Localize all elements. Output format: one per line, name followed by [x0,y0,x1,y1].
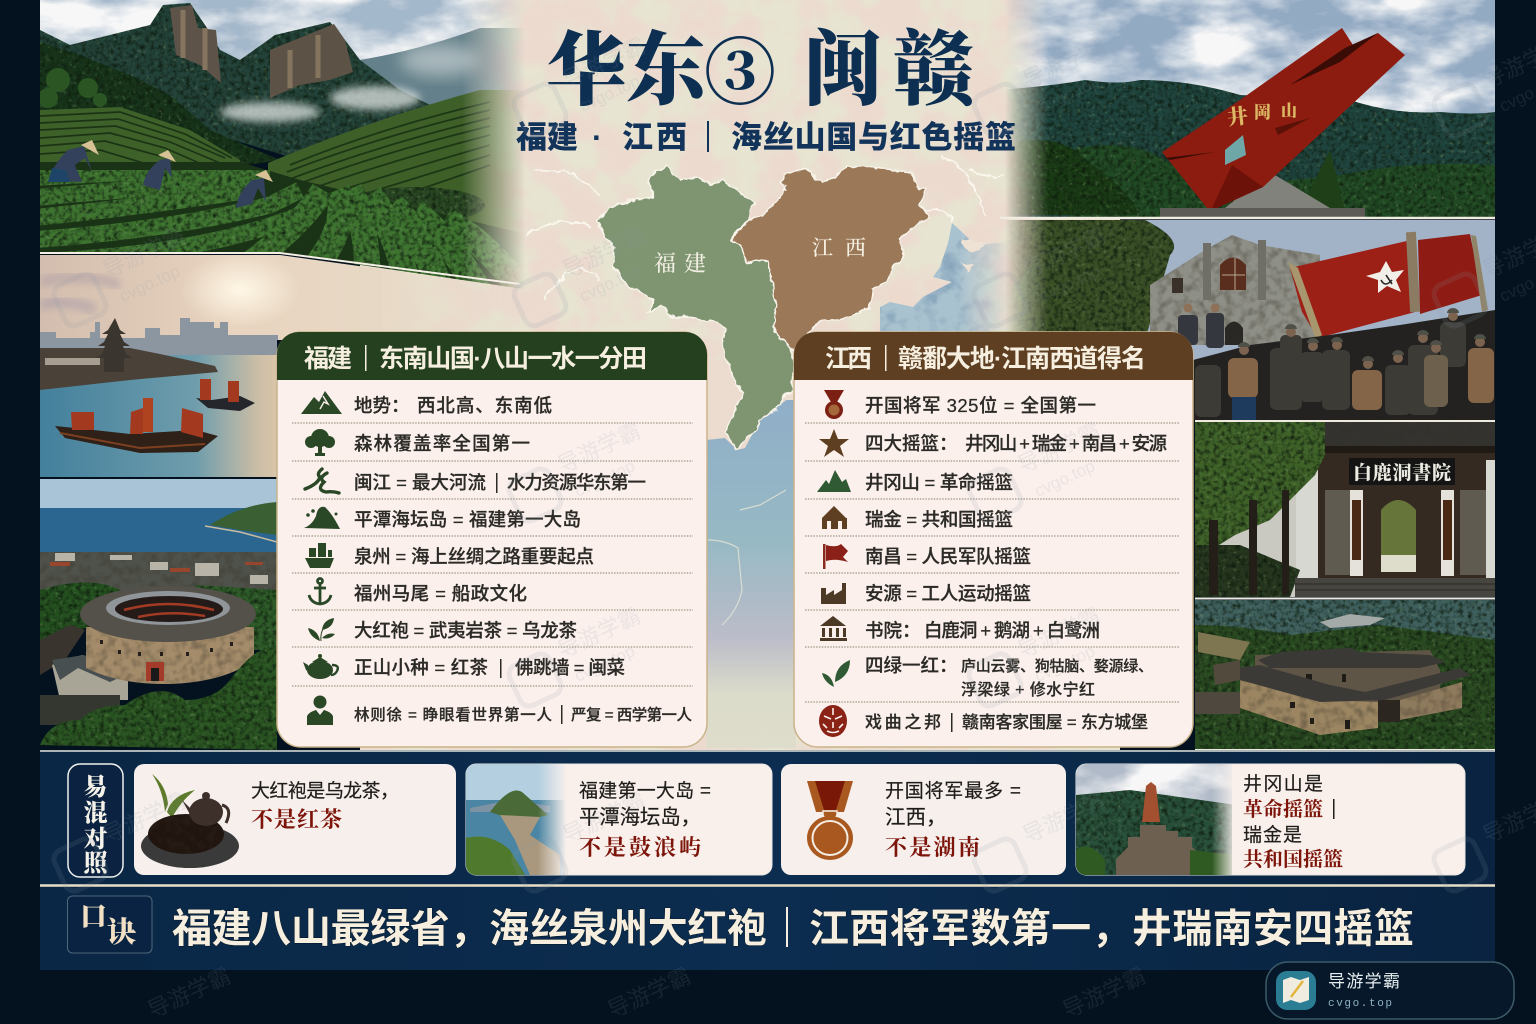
row: Quanzhou: 泉州 = 海上丝绸之路重要起点 [354,546,594,567]
card: cradles: 革命摇篮 [1243,798,1323,821]
photo: Gannan Hakka walled house [1195,600,1495,750]
courtyard walls [1255,650,1440,710]
row: Lin Zexu and Yan Fu: 严复 = 西学第一人 [571,705,692,724]
icon: hall [822,506,847,529]
red monument: 岡 [1254,103,1271,122]
Jiangxi panel header [794,332,1193,380]
photo: Hakka tulou by the sea [40,479,277,750]
mountain range [40,3,440,160]
watermark grid: 导游学霸 [1059,963,1149,1023]
icon: anchor [309,578,331,604]
card: Da Hong Pao [134,764,456,875]
watermark grid: 导游学霸 [99,223,189,283]
photo: Nanchang uprising crowd and red flag [1000,220,1495,420]
badge: easily confused: 照 [84,850,110,877]
divider line right [1000,217,1495,219]
left forest [40,42,280,175]
watermark grid: cvgo.top [572,456,638,501]
Fujian panel header [277,332,707,380]
panel: Jiangxi [794,332,1193,747]
row: Lapsang and Fotiaoqiang: 佛跳墙 = 闽菜 [515,657,625,678]
row: Min River: 水力资源华东第一 [507,472,646,493]
watermark grid: 导游学霸 [604,963,694,1023]
row: Lin Zexu and Yan Fu: 林则徐 = 睁眼看世界第一人 [354,706,552,724]
row: Anyuan: 安源 = 工人运动摇篮 [865,583,1031,604]
photo: Wuyi tea terraces with pickers [30,0,530,300]
mnemonic badge: 诀 [107,916,136,949]
icon: mountains [301,391,342,414]
brand icon [1276,971,1316,1010]
card: Da Hong Pao: 大红袍是乌龙茶， [251,780,399,802]
icon: factory [821,583,846,604]
card: cradles: 瑞金是 [1243,824,1302,846]
tulou roof ring [80,586,256,642]
mist [220,102,320,122]
icon: opera mask [819,705,847,737]
tea picker 1 [48,140,99,182]
hillside greenery [40,582,120,640]
watermark grid: 导游学霸 [554,418,644,478]
title: ③ [704,34,776,114]
card: cradles [1076,764,1465,875]
monument inscription: 井 [1226,104,1249,130]
water [40,355,280,478]
Fujian panel header: 福建 [304,345,352,373]
title: 华东 [546,28,713,116]
row: Nanchang: 南昌 = 人民军队摇篮 [865,546,1031,567]
pagoda [96,318,132,372]
mnemonic text [172,907,1414,951]
photo: Quanzhou harbor with junks [40,255,424,477]
map: Jiangxi region [732,167,928,350]
doorway view [1381,500,1416,572]
row: four greens one red: 四绿一红： [865,655,958,676]
row: opera and Hakka: 赣南客家围屋 = 东方城堡 [962,712,1148,732]
Jiangxi panel header: 赣鄱大地·江南西道得名 [898,345,1146,373]
photo: Jinggangshan monument [1000,0,1495,217]
row: four greens one red: 浮梁绿 + 修水宁红 [961,681,1095,699]
map label Jiangxi: 江西 [812,236,866,260]
Jiangxi panel header: 江西 [825,345,872,373]
island illustration [466,764,566,875]
icon: academy [820,616,847,641]
tea picker 3 [236,170,273,208]
row: Min River [354,472,646,493]
card: generals medal: 开国将军最多 = [885,780,1021,802]
brand badge: cvgo.top [1328,998,1392,1010]
row: Jinggangshan: 井冈山 = 革命摇篮 [865,472,1013,493]
title [546,25,977,116]
monument illustration [1076,764,1236,875]
trees [1195,422,1325,560]
Fujian panel header: 东南山国·八山一水一分田 [379,345,647,373]
tulou wall [86,627,254,684]
subtitle: 福建 [516,120,578,155]
brand badge [1266,962,1514,1019]
red monument: 山 [1281,102,1297,120]
watermark grid: cvgo.top [1037,71,1103,116]
row: academies: 白鹿洞 + 鹅湖 + 白鹭洲 [924,620,1100,641]
tulou gate [146,662,164,681]
row: four cradles: 井冈山 + 瑞金 + 南昌 + 安源 [965,433,1167,454]
mnemonic text: 福建八山最绿省，海丝泉州大红袍 [172,907,767,951]
row: opera and Hakka [865,712,1148,732]
crowd [1178,304,1495,420]
card: Pingtan island: 福建第一大岛 = [579,780,711,802]
watermark grid: 导游学霸 [1019,788,1109,848]
far misty ridge [360,28,521,104]
left terraces [40,107,240,162]
village [40,552,277,594]
card: cradles: 井冈山是 [1243,773,1323,795]
row: Mawei: 福州马尾 = 船政文化 [354,583,527,604]
card: generals medal [781,764,1066,875]
watermark grid: 导游学霸 [1014,418,1104,478]
map label Fujian: 福建 [654,251,706,276]
icon: green mountains [817,470,851,492]
row: Da Hong Pao: 大红袍 = 武夷岩茶 = 乌龙茶 [354,620,577,641]
map: sea and provinces [597,165,1020,748]
gate front [1315,453,1495,578]
mnemonic badge: 口 [80,902,107,932]
row: four greens one red: 庐山云雾、狗牯脑、婺源绿、 [961,657,1153,675]
foreground trees [40,648,277,750]
confusable band [40,750,1495,885]
watermark grid: 导游学霸 [144,963,234,1023]
card: Pingtan island [466,764,772,875]
row: four cradles: 四大摇篮： [865,433,958,454]
subtitle: 江西 [622,120,687,155]
small junk [196,379,255,411]
medal illustration [807,781,853,860]
row: Lin Zexu and Yan Fu [354,705,692,724]
panel: Fujian [277,332,707,747]
icon: island [304,507,340,529]
card: Da Hong Pao: 不是红茶 [251,807,342,832]
watermark grid: 导游学霸 [559,223,649,283]
bottom edge of terrace photo [40,253,520,284]
mnemonic band [40,886,1495,970]
quay [40,348,218,390]
card: Pingtan island: 不是鼓浪屿 [579,835,701,860]
icon: green leaf [822,660,850,687]
side houses [40,625,85,675]
red flag [1288,232,1488,340]
red monument [1162,28,1405,208]
subtitle: 海丝山国与红色摇篮 [731,120,1016,155]
row: opera and Hakka: 戏曲之邦 [865,712,941,732]
row: Min River: 闽江 = 最大河流 [354,472,486,493]
watermark grid: cvgo.top [577,261,643,306]
badge: easily confused: 易 [84,774,108,801]
watermark grid: 导游学霸 [554,603,644,663]
row: four cradles [865,433,1167,454]
watermark grid: cvgo.top [117,261,183,306]
card: generals medal: ， [926,806,946,829]
row: forest: 森林覆盖率全国第一 [354,433,530,454]
watermark grid: cvgo.top [572,641,638,686]
row: terrain: 西北高、东南低 [417,395,552,416]
watermark grid: 导游学霸 [559,33,649,93]
watermark grid: cvgo.top [1032,456,1098,501]
icon: red flag [823,544,848,569]
badge: easily confused [68,764,123,877]
badge: easily confused: 对 [84,826,108,853]
icon: person [307,696,333,725]
subtitle: · [592,120,602,155]
skyline [40,318,278,355]
watermark grid: 导游学霸 [99,788,189,848]
flag star [1366,261,1404,293]
icon: river [305,469,339,493]
row: academies: 书院： [865,620,921,641]
row: terrain: 地势： [354,395,410,416]
watermark grid: cvgo.top [1032,641,1098,686]
icon: teapot [303,654,338,679]
badge: easily confused: 混 [84,800,108,827]
watermark grid: 导游学霸 [1019,223,1109,283]
row: generals: 开国将军 325位 = 全国第一 [865,395,1096,416]
plaque: 白鹿洞書院 [1353,461,1451,484]
tree [1007,220,1174,332]
big junk [55,398,218,453]
subtitle [516,120,1016,155]
watermark grid: cvgo.top [577,71,643,116]
card: Pingtan island: 平潭海坛岛， [579,806,701,829]
east sea patch [880,223,1020,332]
row: Lapsang and Fotiaoqiang: 正山小种 = 红茶 [354,657,488,678]
map: Fujian region [597,165,793,450]
watermark grid: 导游学霸 [1014,603,1104,663]
tea picker 2 [143,150,176,190]
watermark grid: 导游学霸 [559,788,649,848]
foreground trees [1000,140,1140,215]
icon: medal [824,390,844,419]
card: generals medal: 江西 [885,806,926,829]
south sea strip [706,400,796,748]
roof [1315,422,1495,446]
row: terrain [354,395,552,416]
icon: ship [305,543,334,568]
steps [1295,578,1495,597]
brand badge: 导游学霸 [1328,972,1400,991]
card: generals medal: 不是湖南 [885,835,980,860]
pedestal [1225,172,1330,208]
icon: tree [305,429,335,456]
watermark grid: 导游学霸 [1019,33,1109,93]
row: Lapsang and Fotiaoqiang [354,657,625,678]
icon: tea leaf [308,618,335,641]
title: 闽赣 [802,25,977,116]
row: Ruijin: 瑞金 = 共和国摇篮 [865,509,1013,530]
mnemonic badge [68,896,152,953]
mnemonic text: 江西将军数第一，井瑞南安四摇篮 [809,907,1414,951]
row: Pingtan: 平潭海坛岛 = 福建第一大岛 [354,509,581,530]
tea illustration [141,774,239,868]
tea rows [40,162,530,295]
mountains [1000,80,1495,217]
card: cradles: 共和国摇篮 [1243,848,1343,871]
right terraces [268,90,530,240]
map parchment background [360,0,1120,750]
old building [1150,235,1320,345]
watermark grid: cvgo.top [1037,261,1103,306]
row: four greens one red [865,655,1153,699]
icon: star [819,429,849,457]
photo: White Deer Grotto Academy gate [1195,422,1495,597]
